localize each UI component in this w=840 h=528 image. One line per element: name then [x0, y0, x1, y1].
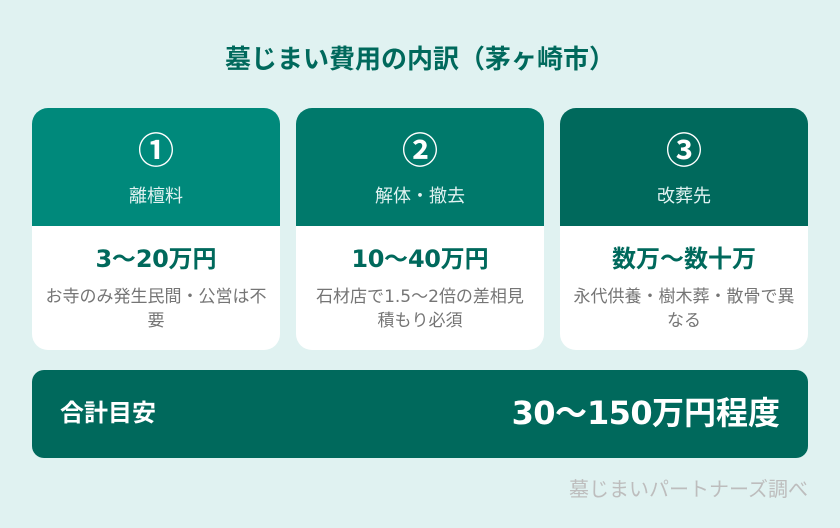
- total label: 合計目安: [60, 393, 156, 428]
- value: step 2: 10～40万円: [351, 239, 489, 274]
- note: step 1: お寺のみ発生民間・公営は不要: [46, 282, 266, 331]
- panel: step 2: [296, 108, 544, 350]
- header: step 3: ③: [666, 122, 702, 174]
- header: step 1: 離檀料: [129, 182, 183, 208]
- value: step 1: 3～20万円: [96, 239, 216, 274]
- note: step 2: 石材店で1.5～2倍の差相見積もり必須: [316, 282, 524, 331]
- value: step 3: 数万～数十万: [612, 239, 756, 274]
- note: step 3: 永代供養・樹木葬・散骨で異なる: [574, 282, 794, 331]
- header: step 2: ②: [402, 122, 438, 174]
- header: step 2: [296, 108, 544, 226]
- title: 墓じまい費用の内訳（茅ヶ崎市）: [225, 39, 615, 76]
- header: step 1: [32, 108, 280, 226]
- total bar: [32, 370, 808, 458]
- panel: step 3: [560, 108, 808, 350]
- header: step 2: 解体・撤去: [375, 182, 465, 208]
- header: step 3: 改葬先: [657, 182, 711, 208]
- panel: step 1: [32, 108, 280, 350]
- total value: 30～150万円程度: [512, 388, 780, 434]
- header: step 1: ①: [138, 122, 174, 174]
- header: step 3: [560, 108, 808, 226]
- source note: 墓じまいパートナーズ調べ: [569, 473, 808, 502]
